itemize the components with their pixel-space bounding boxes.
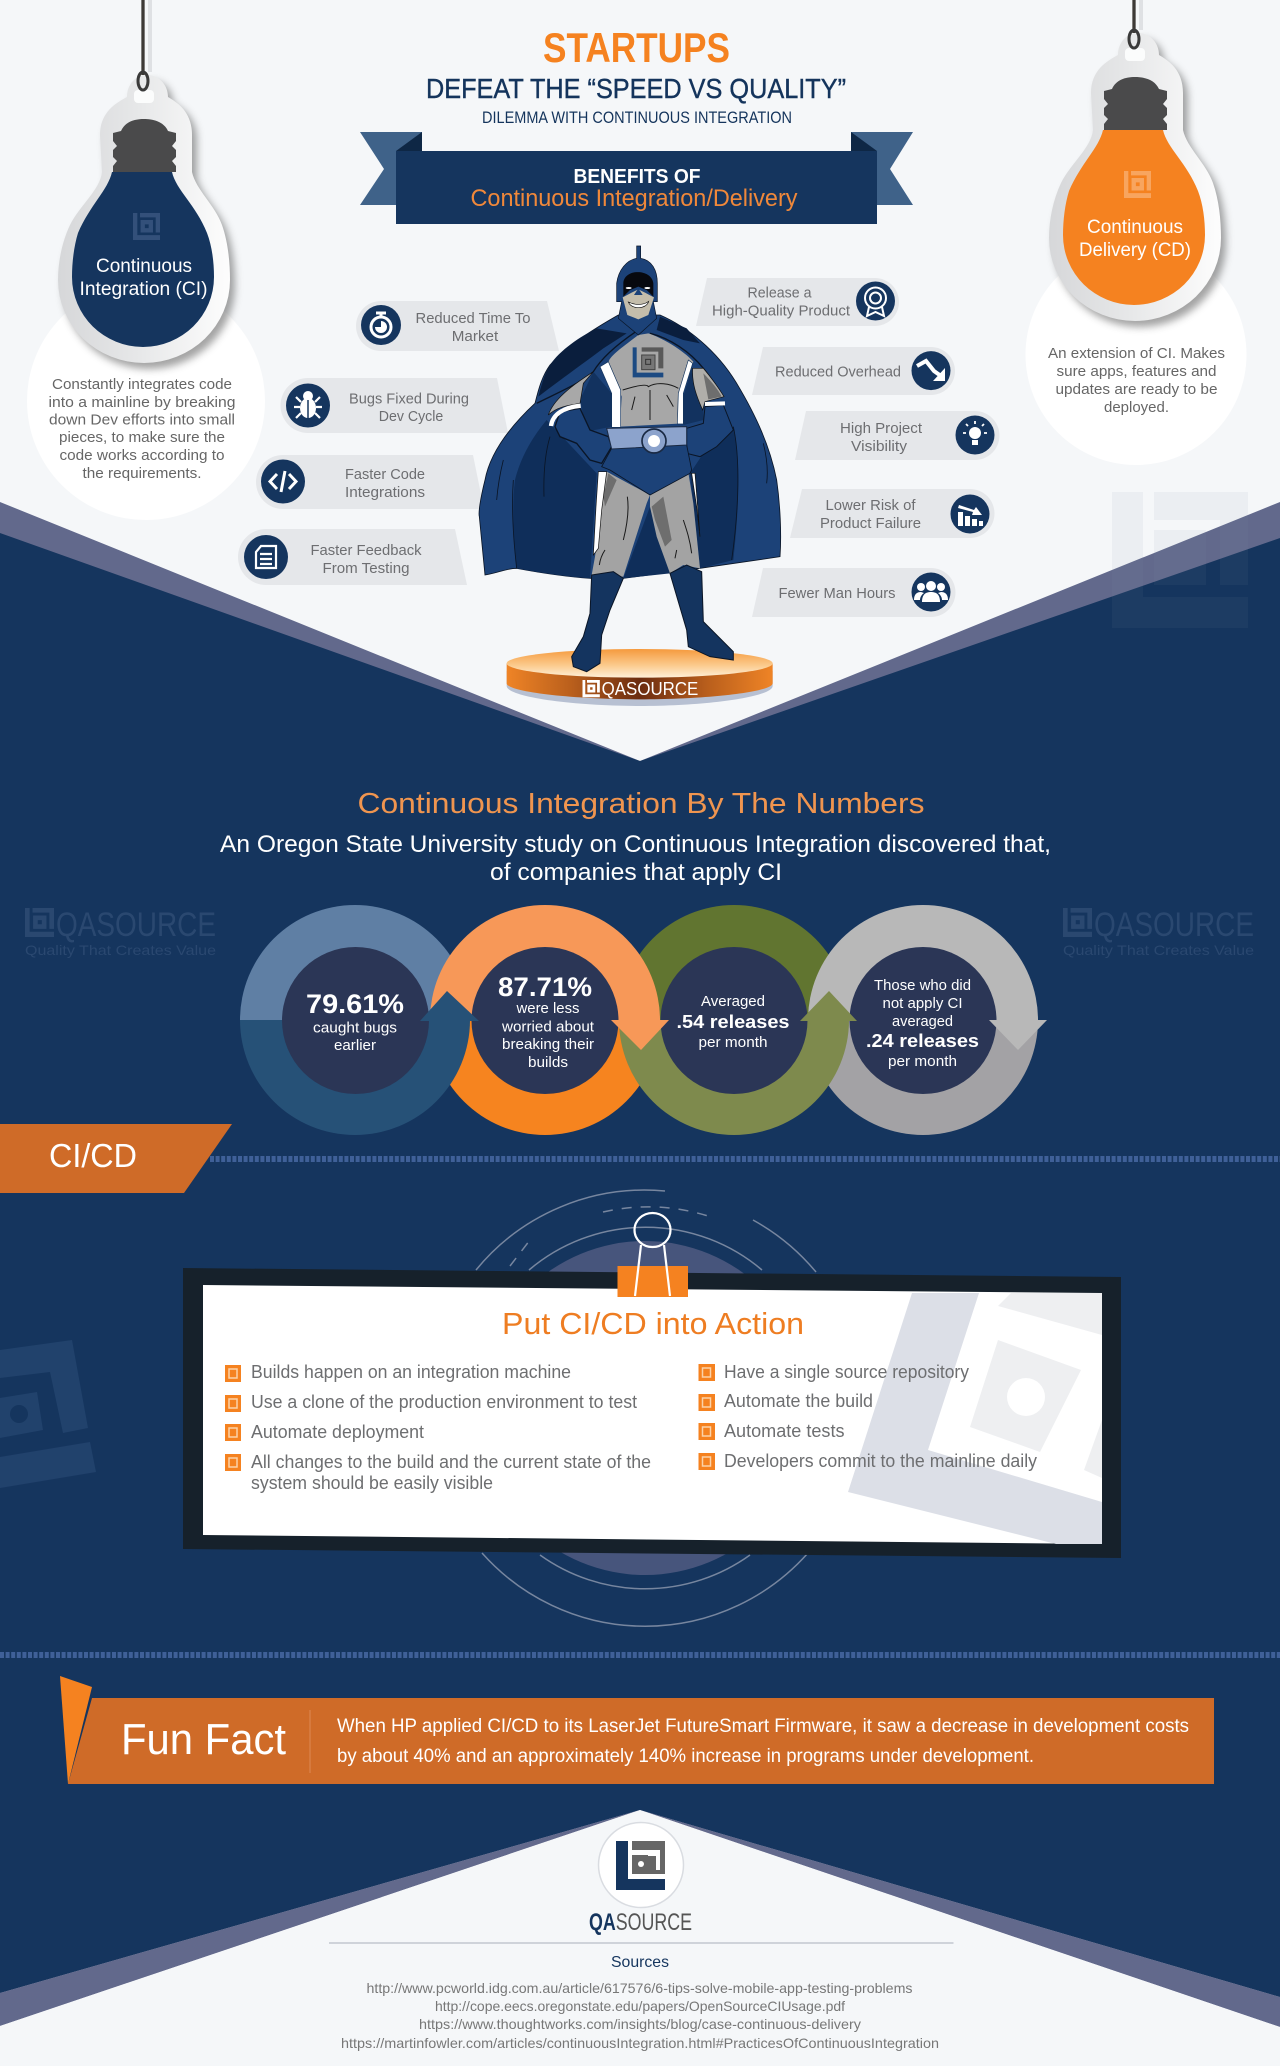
text: CD description: sure apps, features and <box>1056 363 1216 380</box>
chest logo <box>633 347 663 377</box>
title block <box>426 24 846 127</box>
heading: put CI/CD into action: Put CI/CD into Action <box>502 1306 804 1341</box>
list: right column: Automate the build <box>724 1391 873 1411</box>
stat: 79.61%: 79.61% <box>306 989 404 1019</box>
benefit: faster code integrations: Faster Code <box>345 466 425 483</box>
list: left column: Builds happen on an integration machine <box>251 1362 571 1382</box>
stat: 87.71%: worried about <box>501 1019 595 1036</box>
text: CD description <box>1048 345 1225 416</box>
benefit: lower risk of product failure: Lower Risk of <box>826 497 916 514</box>
stat: 79.61%: earlier <box>334 1037 376 1054</box>
stat: .24 releases: not apply CI <box>882 995 962 1012</box>
list: right column: Developers commit to the mainline daily <box>724 1451 1037 1471</box>
ribbon: benefits heading: Continuous Integration/Delivery <box>470 185 798 212</box>
banner: CI/CD: CI/CD <box>49 1137 137 1174</box>
illustration: superhero on QASource platform <box>479 246 781 706</box>
ring arrows <box>420 991 1047 1050</box>
stat: 87.71% <box>498 972 595 1071</box>
icon: code brackets <box>270 471 296 492</box>
watermark: QASource left: QASOURCE <box>56 906 216 944</box>
list: right column <box>698 1362 1037 1471</box>
platform <box>507 649 773 706</box>
panel: continuous integration bulb <box>27 0 265 520</box>
stat: 79.61%: caught bugs <box>313 1020 397 1037</box>
panel: fun fact: When HP applied CI/CD to its LaserJet FutureSmart Firmware, it saw a decrease in development costs <box>337 1716 1189 1737</box>
benefit: faster feedback from testing <box>238 529 467 585</box>
stat: 87.71%: builds <box>528 1054 568 1071</box>
benefit: high project visibility: High Project <box>840 420 923 437</box>
icon: people <box>914 581 948 602</box>
text: CI description: down Dev efforts into small <box>49 412 235 428</box>
banner: CI/CD <box>0 1124 232 1193</box>
cape interior <box>513 420 738 578</box>
watermark: board logo <box>848 1293 1102 1544</box>
stat: .24 releases: per month <box>888 1053 957 1070</box>
watermark: QASource right: Quality That Creates Value <box>1063 942 1254 958</box>
benefit: bugs fixed during dev cycle: Dev Cycle <box>379 408 443 425</box>
benefit: release a high-quality product: Release a <box>748 284 812 302</box>
stat: 79.61% <box>306 989 404 1054</box>
ring tops <box>240 905 1038 1020</box>
stat: .24 releases <box>866 977 979 1070</box>
benefit: fewer man hours: Fewer Man Hours <box>778 585 896 602</box>
shorts <box>602 445 692 495</box>
stat: .54 releases: Averaged <box>701 993 765 1010</box>
benefit: reduced overhead: Reduced Overhead <box>775 364 901 381</box>
text: study intro: of companies that apply CI <box>490 859 782 886</box>
ribbon: benefits heading <box>360 132 913 224</box>
benefit: reduced overhead <box>752 347 955 395</box>
stat: .54 releases: per month <box>698 1034 768 1051</box>
gloves <box>555 408 612 463</box>
benefit: bugs fixed during dev cycle <box>280 378 508 433</box>
stat: .24 releases: Those who did <box>874 977 971 994</box>
watermark: QASource left: Quality That Creates Value <box>25 942 216 958</box>
benefit: reduced time to market: Market <box>452 328 499 345</box>
subheading: DEFEAT THE “SPEED VS QUALITY” <box>426 73 846 104</box>
panel: put CI/CD into action board <box>183 1213 1121 1558</box>
belt <box>607 427 687 453</box>
watermark: QASource left <box>25 906 216 958</box>
benefit: faster code integrations <box>256 455 484 509</box>
text: CI description: code works according to <box>60 447 224 464</box>
text: sources: Sources <box>611 1954 669 1971</box>
stat: .54 releases <box>676 993 790 1051</box>
stat: .24 releases: .24 releases <box>866 1031 979 1051</box>
text: CI description: into a mainline by breaking <box>48 394 236 411</box>
text: CI description: the requirements. <box>82 465 202 482</box>
watermark: logo top right <box>1112 492 1248 628</box>
benefit: release a high-quality product: High-Quality Product <box>712 302 851 320</box>
panel: continuous delivery bulb: Delivery (CD) <box>1079 240 1191 261</box>
right arm <box>693 368 724 410</box>
ring bottoms <box>240 1020 1038 1135</box>
tagline: DILEMMA WITH CONTINUOUS INTEGRATION <box>482 108 792 127</box>
chart: four linked CI statistic rings <box>240 905 1047 1135</box>
text: study intro: An Oregon State University study on Continuous Integration discovered that, <box>220 831 1051 858</box>
text: CD description: deployed. <box>1104 399 1169 416</box>
benefit: high project visibility <box>795 411 999 460</box>
stat: .54 releases: .54 releases <box>676 1012 790 1032</box>
text: sources: http://www.pcworld.idg.com.au/article/617576/6-tips-solve-mobile-app-testing-problems <box>366 1980 912 1996</box>
ring centres <box>282 947 996 1094</box>
cape <box>479 315 781 578</box>
list: left column: Use a clone of the production environment to test <box>251 1392 637 1412</box>
panel: navy background with chevron edges <box>0 502 1280 2066</box>
stat: 87.71%: 87.71% <box>498 972 592 1002</box>
stat: 87.71%: breaking their <box>502 1036 594 1053</box>
benefit: lower risk of product failure: Product Failure <box>820 515 921 532</box>
text: CI description: Constantly integrates code <box>52 376 232 393</box>
platform: QASOURCE <box>602 678 698 699</box>
watermark: QASource right <box>1063 906 1254 958</box>
stat: 87.71%: were less <box>516 1000 580 1017</box>
stat: .24 releases: averaged <box>892 1013 953 1030</box>
panel: continuous delivery bulb: Continuous <box>1087 217 1183 238</box>
icon: bug <box>294 391 322 418</box>
text: CI description <box>48 376 236 482</box>
legs <box>592 472 650 577</box>
icon: award badge <box>865 288 886 316</box>
text: CD description: An extension of CI. Makes <box>1048 345 1225 362</box>
cape shoulder shadows <box>538 317 700 397</box>
heading: startups: STARTUPS <box>543 24 730 71</box>
panel: continuous delivery bulb <box>1026 0 1246 465</box>
icon: downtrend arrow <box>917 361 945 381</box>
icon: falling bar chart <box>958 505 983 526</box>
benefit: faster code integrations: Integrations <box>345 484 425 501</box>
benefit: bugs fixed during dev cycle: Bugs Fixed During <box>349 390 469 408</box>
icon: document <box>256 546 276 568</box>
benefit: release a high-quality product <box>696 278 899 326</box>
panel: continuous integration bulb: Integration (CI) <box>80 279 208 300</box>
text: sources: https://martinfowler.com/articles/continuousIntegration.html#PracticesOfContinuousIntegration <box>341 2035 939 2051</box>
panel: fun fact: Fun Fact <box>121 1715 286 1764</box>
benefit: reduced time to market <box>356 301 559 351</box>
text: sources: http://cope.eecs.oregonstate.edu/papers/OpenSourceCIUsage.pdf <box>435 1998 845 2014</box>
list: left column: Automate deployment <box>251 1422 424 1442</box>
panel: continuous integration bulb: Continuous <box>96 256 192 277</box>
heading: continuous integration by the numbers: Continuous Integration By The Numbers <box>358 788 924 820</box>
icon: light bulb <box>963 421 987 445</box>
left arm <box>548 372 593 415</box>
watermark: rotated logo at left edge <box>0 1340 96 1488</box>
inner cape behind arms <box>580 368 703 432</box>
text: CI description: pieces, to make sure the <box>59 429 225 446</box>
benefit: fewer man hours <box>752 568 956 617</box>
benefit: faster feedback from testing: From Testing <box>322 560 410 577</box>
logo: QASource footer: QASOURCE <box>589 1909 692 1936</box>
text: study intro <box>220 831 1051 886</box>
ribbon: benefits heading: BENEFITS OF <box>574 166 700 188</box>
benefit: lower risk of product failure <box>790 489 994 538</box>
head and mask <box>617 246 657 335</box>
list: left column: All changes to the build and the current state of the <box>251 1452 651 1472</box>
icon: stopwatch <box>371 313 391 337</box>
decoration: concentric target behind board <box>476 1190 816 1626</box>
list: left column: system should be easily visible <box>251 1473 493 1493</box>
benefit: faster feedback from testing: Faster Feedback <box>310 542 422 559</box>
icon: binder clip <box>618 1213 688 1297</box>
benefit: high project visibility: Visibility <box>851 438 908 455</box>
logo: QASource footer <box>589 1822 692 1936</box>
text: sources <box>341 1954 939 2051</box>
text: CD description: updates are ready to be <box>1056 381 1218 398</box>
panel: fun fact <box>60 1676 1214 1784</box>
list: right column: Automate tests <box>724 1421 844 1441</box>
list: right column: Have a single source repository <box>724 1362 969 1382</box>
list: left column <box>225 1362 651 1493</box>
torso <box>608 333 693 427</box>
text: sources: https://www.thoughtworks.com/insights/blog/case-continuous-delivery <box>419 2016 861 2032</box>
panel: fun fact: by about 40% and an approximately 140% increase in programs under development. <box>337 1746 1034 1767</box>
benefit: reduced time to market: Reduced Time To <box>416 310 530 327</box>
boots <box>572 572 623 672</box>
